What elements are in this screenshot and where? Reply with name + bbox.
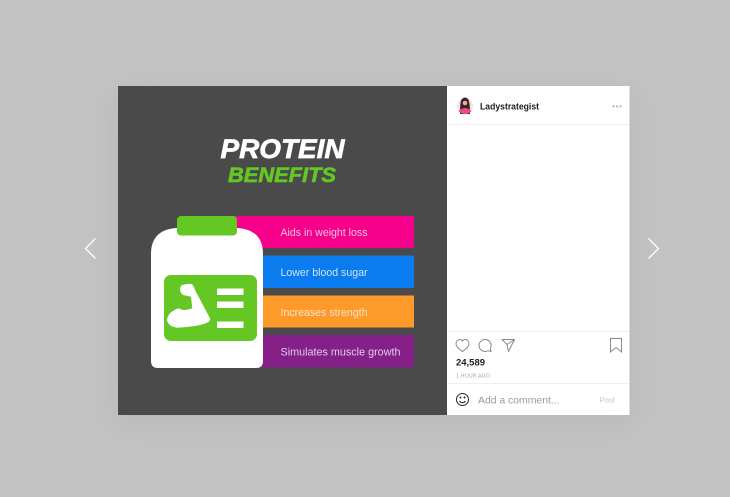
jar label	[164, 275, 257, 341]
bar: strength	[255, 296, 414, 328]
bar: muscle growth	[255, 335, 414, 368]
icon: share	[502, 340, 514, 352]
jar icon	[151, 216, 263, 368]
jar body	[151, 228, 263, 368]
more menu	[612, 105, 622, 107]
icon: smiley	[456, 394, 468, 406]
subtitle: benefits: BENEFITS	[228, 164, 336, 187]
bar: weight loss: Aids in weight loss	[280, 227, 368, 239]
bar: strength: Increases strength	[280, 307, 368, 319]
icon: flexed arm	[167, 284, 210, 328]
bar: weight loss	[225, 216, 414, 248]
label lines	[217, 288, 244, 328]
like count: 24,589	[456, 358, 485, 368]
icon: heart	[456, 340, 469, 352]
panel: infographic	[118, 86, 447, 415]
avatar	[457, 98, 473, 114]
bar: blood sugar	[255, 256, 414, 288]
post button: Post	[600, 396, 616, 404]
title: protein: PROTEIN	[220, 134, 345, 164]
left arrow	[86, 238, 96, 258]
icon: bookmark	[610, 338, 622, 352]
right arrow	[648, 238, 658, 258]
bar: muscle growth: Simulates muscle growth	[280, 346, 400, 358]
comment input: Add a comment...	[478, 394, 560, 406]
icon: comment	[479, 339, 491, 352]
username: Ladystrategist	[480, 102, 539, 112]
jar lid	[177, 216, 237, 236]
panel: post sidebar	[447, 86, 630, 415]
bar: blood sugar: Lower blood sugar	[280, 267, 368, 279]
timestamp: 1 HOUR AGO	[456, 374, 490, 380]
